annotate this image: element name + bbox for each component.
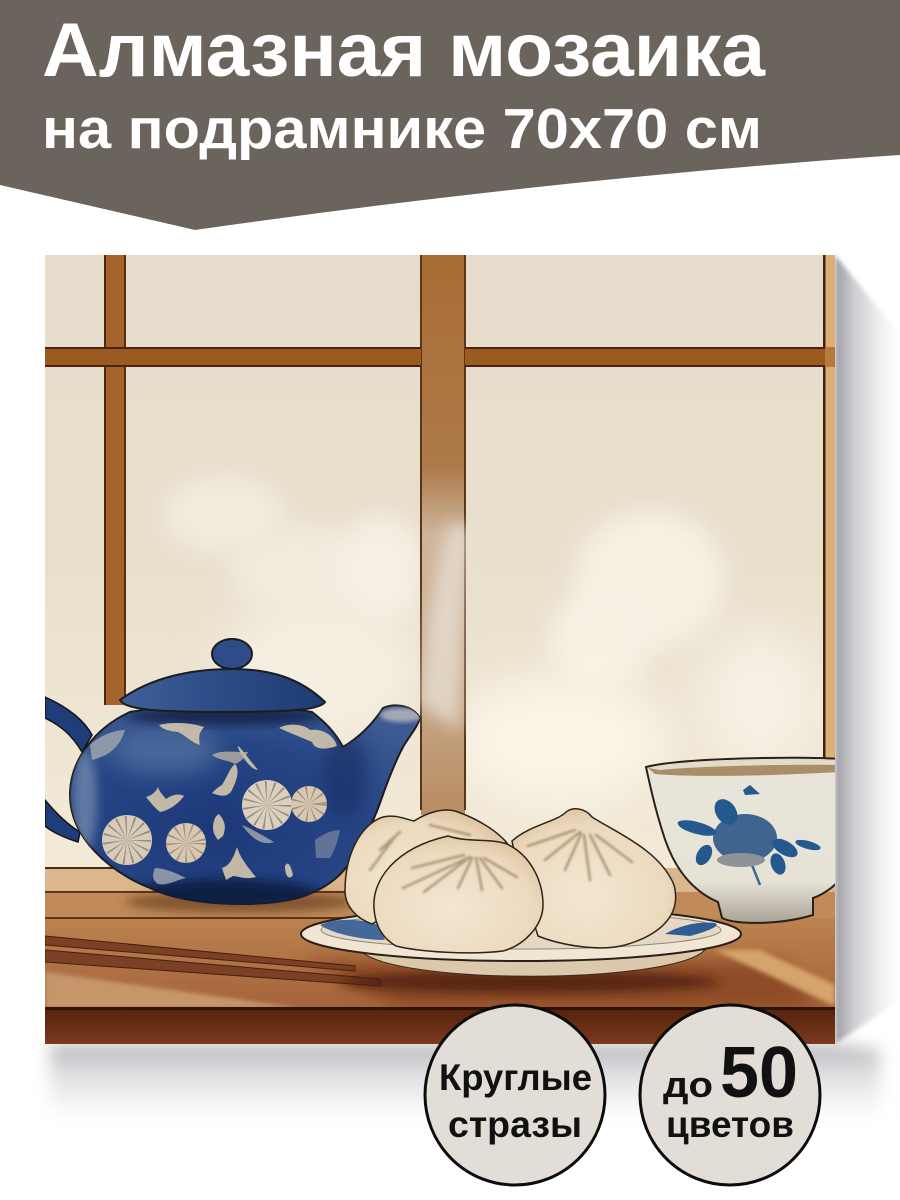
bowl — [646, 758, 840, 923]
lid — [120, 669, 325, 712]
steam behind the frame — [165, 477, 820, 805]
bowl flower — [676, 785, 822, 885]
plate shadow — [340, 971, 720, 993]
badge: up to 50 colours: до — [663, 1064, 713, 1105]
plate rim — [301, 907, 741, 961]
subtitle: на подрамнике 70х70 см — [42, 97, 762, 161]
title: Алмазная мозаика — [42, 8, 766, 93]
dumplings — [345, 809, 676, 953]
flowers — [90, 723, 340, 884]
window sill and table — [45, 867, 835, 1044]
painting: tea and dumplings by the window — [45, 255, 840, 1044]
knob — [212, 639, 252, 669]
steam column from the spout — [420, 514, 466, 734]
body shading — [73, 707, 424, 911]
badge: up to 50 colours: 50 — [720, 1033, 798, 1113]
badge: round rhinestones — [425, 1005, 605, 1185]
right dumpling — [512, 809, 676, 948]
leaves and small petals — [146, 723, 337, 880]
header banner — [0, 0, 900, 230]
badge: round rhinestones: Круглые — [439, 1057, 592, 1098]
window panes — [45, 255, 835, 875]
window frame — [45, 255, 835, 875]
back left dumpling — [345, 810, 507, 924]
canvas shadow: right and bottom — [50, 255, 900, 1120]
handle — [45, 697, 92, 842]
plate pattern — [320, 920, 385, 940]
plate — [301, 907, 741, 993]
front left dumpling — [374, 836, 543, 953]
body and spout — [70, 705, 420, 904]
badge: up to 50 colours — [640, 1005, 820, 1185]
badge: round rhinestones: стразы — [448, 1104, 582, 1145]
teapot — [45, 639, 424, 913]
pleats — [370, 825, 632, 892]
plate base — [360, 950, 705, 976]
badge: up to 50 colours: цветов — [666, 1104, 794, 1145]
chopsticks — [45, 936, 380, 986]
teapot shadow — [125, 891, 355, 913]
